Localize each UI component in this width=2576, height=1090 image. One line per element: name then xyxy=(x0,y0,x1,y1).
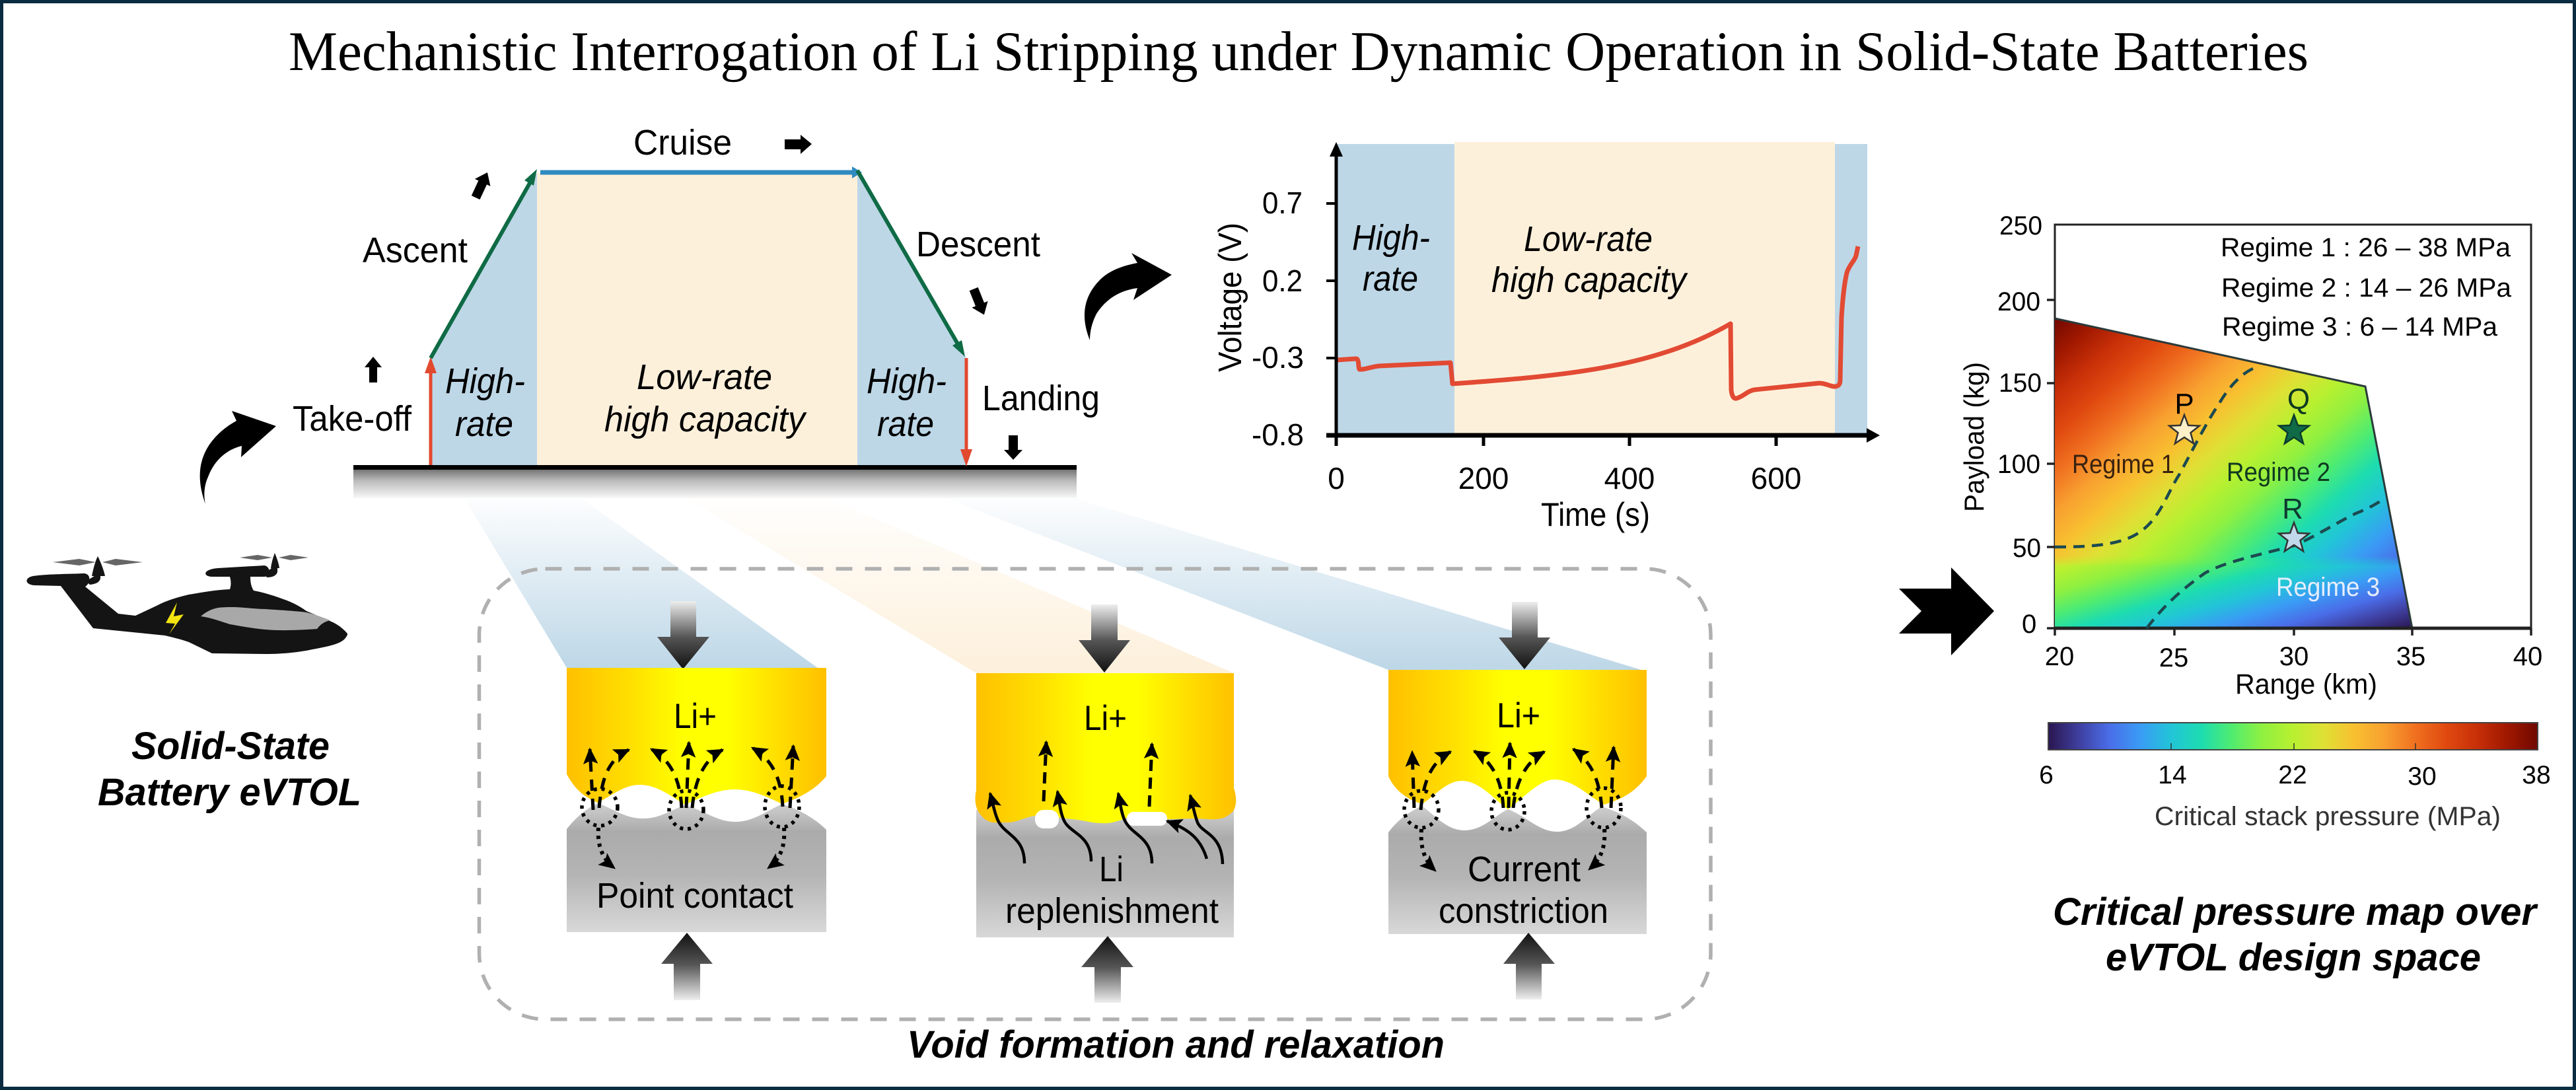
icon: cruise direction arrow xyxy=(785,135,812,154)
x axis title: Time (s) xyxy=(1541,496,1650,533)
fuselage xyxy=(26,565,347,654)
caption: critical pressure map: eVTOL design space xyxy=(2106,936,2481,979)
label: high-rate left: High- xyxy=(445,361,525,401)
y tick labels: 250 xyxy=(1999,211,2042,240)
chart: voltage vs time xyxy=(1213,142,1880,533)
caption: void formation: Void formation and relaxation xyxy=(907,1023,1445,1066)
label: high-rate right: rate xyxy=(877,404,934,444)
curved arrow: flight profile to voltage chart xyxy=(1085,253,1172,340)
design space outline xyxy=(2055,318,2412,628)
label: Li replenishment: replenishment xyxy=(1005,891,1219,931)
low-rate band xyxy=(1454,142,1835,435)
colour bar tick labels: 14 xyxy=(2158,761,2187,789)
chart: critical pressure map xyxy=(1958,211,2542,700)
take-off arrow xyxy=(425,357,437,465)
dotted current arrows xyxy=(1421,829,1604,871)
separator layer xyxy=(1388,806,1647,934)
panel: Li replenishment xyxy=(976,604,1236,1003)
blue high-rate region right xyxy=(857,173,966,465)
regime legend xyxy=(2221,233,2512,342)
dashed ion arrows xyxy=(1044,742,1152,807)
label: high-rate right: High- xyxy=(867,361,947,401)
lightning bolt xyxy=(166,602,184,634)
x tick labels: 400 xyxy=(1604,461,1655,495)
compression arrow top xyxy=(657,601,709,669)
regime boundary 1 xyxy=(2055,367,2258,547)
label: low-rate high capacity: Low-rate xyxy=(637,357,772,397)
label: regime 3: Regime 3 xyxy=(2276,573,2380,602)
x tick labels: 200 xyxy=(1458,461,1509,495)
y tick labels: 0.2 xyxy=(1262,264,1303,298)
label: current constriction: Current xyxy=(1468,850,1581,889)
light beams from flight phases to void panels xyxy=(464,498,1641,673)
label: take-off: Take-off xyxy=(293,399,412,439)
point R: R xyxy=(2282,493,2303,525)
label: Li+: Li+ xyxy=(674,697,717,736)
dotted contact circles xyxy=(1404,788,1621,830)
label: Li replenishment: Li xyxy=(1099,850,1124,889)
x tick labels: 40 xyxy=(2513,642,2542,671)
landing arrow xyxy=(960,358,972,466)
voids xyxy=(1035,810,1167,828)
point Q xyxy=(2279,383,2310,443)
label: current constriction: constriction xyxy=(1439,891,1608,931)
panel: point contact xyxy=(567,601,826,1000)
icon: take-off direction arrow xyxy=(365,357,382,382)
label: point contact: Point contact xyxy=(596,876,793,916)
label: high-rate: rate xyxy=(1363,259,1418,299)
y tick labels: -0.8 xyxy=(1252,418,1304,452)
point Q: Q xyxy=(2287,383,2310,416)
electrolyte layer xyxy=(567,668,826,805)
solid Li flow arrows xyxy=(990,791,1223,864)
colour bar tick labels: 30 xyxy=(2408,762,2437,791)
descent arrow xyxy=(857,170,965,357)
point P xyxy=(2169,388,2200,443)
compression arrow top xyxy=(1079,604,1130,672)
rotor hubs xyxy=(86,553,279,585)
y tick labels: -0.3 xyxy=(1252,340,1304,375)
compression arrow top xyxy=(1499,602,1550,669)
regime legend: Regime 1 : 26 – 38 MPa xyxy=(2221,233,2511,262)
label: high-rate left: rate xyxy=(455,404,513,444)
colour bar xyxy=(2039,723,2551,831)
dashed ion arrows xyxy=(590,743,793,810)
x tick labels: 0 xyxy=(1328,461,1345,495)
label: Li+: Li+ xyxy=(1084,699,1127,738)
voltage curve xyxy=(1336,246,1858,398)
y tick labels: 0 xyxy=(2022,610,2036,639)
x tick labels: 600 xyxy=(1751,461,1801,495)
electrolyte layer xyxy=(1388,670,1647,809)
y tick labels: 150 xyxy=(1999,369,2042,398)
x axis title: Range (km) xyxy=(2235,669,2377,700)
point R xyxy=(2279,493,2309,551)
label: low-rate high capacity: high capacity xyxy=(1491,260,1688,300)
caption: eVTOL: Battery eVTOL xyxy=(98,771,361,814)
x tick labels xyxy=(1328,461,1801,495)
x tick labels: 20 xyxy=(2045,642,2074,671)
separator layer xyxy=(567,803,826,932)
label: high-rate: High- xyxy=(1352,218,1430,258)
label: cruise: Cruise xyxy=(633,123,732,163)
high-rate band xyxy=(1336,144,1454,435)
regime legend: Regime 2 : 14 – 26 MPa xyxy=(2221,273,2512,303)
x tick labels: 35 xyxy=(2396,642,2425,671)
label: low-rate high capacity: Low-rate xyxy=(1524,219,1653,259)
y tick labels: 50 xyxy=(2013,534,2041,563)
point P: P xyxy=(2174,388,2194,420)
icon: descent direction arrow xyxy=(966,286,992,318)
y tick labels: 0.7 xyxy=(1262,186,1303,220)
regime legend: Regime 3 : 6 – 14 MPa xyxy=(2222,312,2498,342)
ascent arrow xyxy=(431,169,537,358)
colour bar tick labels: 38 xyxy=(2522,761,2551,789)
y tick labels: 100 xyxy=(1997,450,2040,479)
label: ascent: Ascent xyxy=(363,231,468,270)
label: landing: Landing xyxy=(982,379,1100,418)
caption: eVTOL: Solid-State xyxy=(131,725,330,768)
label: regime 1: Regime 1 xyxy=(2072,450,2174,479)
axes xyxy=(1326,142,1880,446)
x tick labels: 25 xyxy=(2159,643,2188,672)
dotted current arrows xyxy=(598,828,784,868)
icon: ascent direction arrow xyxy=(468,168,495,201)
regime boundary 2 xyxy=(2147,498,2384,628)
rotor blades xyxy=(53,555,308,565)
y tick labels xyxy=(1252,186,1304,452)
colour bar tick labels xyxy=(2039,761,2551,791)
block arrow to pressure map xyxy=(1899,567,1994,655)
cruise arrow xyxy=(540,166,862,178)
curved arrow: aircraft to flight profile xyxy=(200,411,276,504)
panel: flight profile xyxy=(293,123,1100,498)
y tick labels xyxy=(1997,211,2042,639)
colour bar title: Critical stack pressure (MPa) xyxy=(2155,802,2501,831)
axis baseline and ticks xyxy=(2047,300,2531,636)
blue high-rate region left xyxy=(431,173,537,465)
label: Li+: Li+ xyxy=(1497,696,1540,735)
x tick labels xyxy=(2045,642,2542,672)
label: low-rate high capacity: high capacity xyxy=(604,400,807,439)
dashed ion arrows xyxy=(1412,743,1614,810)
colour bar tick labels: 6 xyxy=(2039,761,2054,789)
label: regime 2: Regime 2 xyxy=(2227,458,2330,487)
dashed group box xyxy=(480,569,1711,1019)
panel: current constriction xyxy=(1388,602,1647,999)
compression arrow bottom xyxy=(1081,936,1133,1003)
landing band xyxy=(1835,144,1867,435)
compression arrow bottom xyxy=(661,933,713,1000)
ground xyxy=(353,465,1077,498)
icon: eVTOL aircraft xyxy=(26,553,347,654)
label: descent: Descent xyxy=(916,225,1040,264)
title: Mechanistic Interrogation of Li Stripping under Dynamic Operation in Solid-State Batteries xyxy=(289,20,2308,83)
dotted contact circles xyxy=(582,786,799,829)
electrolyte layer xyxy=(976,673,1236,823)
compression arrow bottom xyxy=(1503,933,1555,999)
beige low-rate region xyxy=(537,173,857,465)
canopy xyxy=(201,607,330,630)
heat map xyxy=(2055,318,2412,628)
icon: landing direction arrow xyxy=(1004,435,1022,460)
caption: critical pressure map: Critical pressure map over xyxy=(2053,890,2538,933)
colour bar tick labels: 22 xyxy=(2278,761,2307,789)
plot box xyxy=(2055,225,2531,628)
separator layer xyxy=(976,810,1234,937)
x tick labels: 30 xyxy=(2279,642,2308,671)
y axis title: Voltage (V) xyxy=(1213,223,1248,372)
y axis title: Payload (kg) xyxy=(1958,362,1989,512)
y tick labels: 200 xyxy=(1997,287,2040,316)
